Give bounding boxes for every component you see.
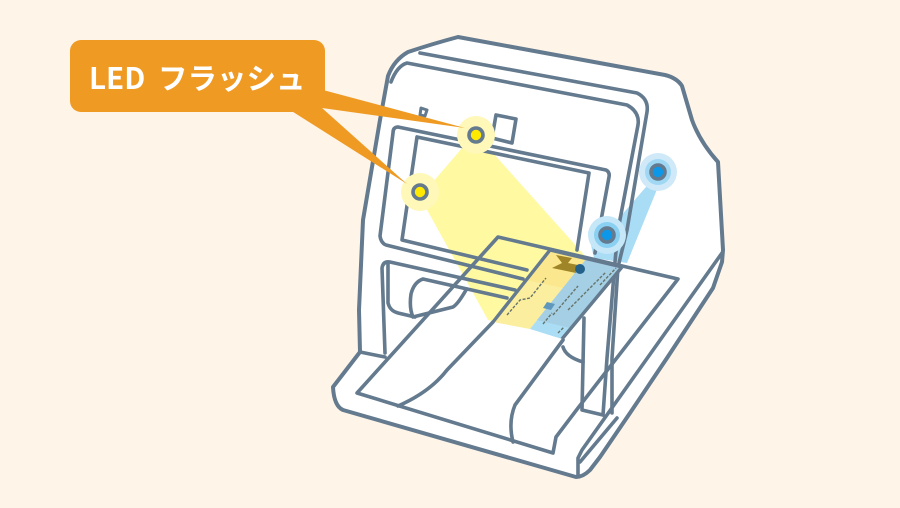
LED dot: left <box>401 173 439 211</box>
front panel bands <box>420 53 647 413</box>
tray ribbons <box>398 322 493 406</box>
device body silhouette <box>333 37 723 477</box>
blue sensor dot: right <box>639 153 677 191</box>
callout label: LED フラッシュ <box>89 56 305 98</box>
card overlap tint <box>537 258 622 328</box>
card print lines <box>507 268 616 333</box>
sensor windows <box>492 115 516 143</box>
yellow flash light <box>420 147 587 329</box>
ID card <box>493 250 622 339</box>
rear support <box>582 318 603 415</box>
base rim <box>578 253 722 476</box>
screen inner frame <box>402 137 589 270</box>
lower slot <box>382 262 515 353</box>
LED dot: top <box>457 116 495 154</box>
device outlines <box>357 53 722 476</box>
paper hump <box>410 279 507 317</box>
callout pointers <box>290 90 465 184</box>
card edges <box>493 250 622 339</box>
callout: LED flash <box>70 40 465 184</box>
card portrait <box>552 255 583 273</box>
blue sensor dot: lower <box>588 216 626 254</box>
card yellow upper tint <box>526 250 587 288</box>
screen outer frame <box>380 127 609 279</box>
blue light beams <box>588 180 660 263</box>
card blue half <box>530 258 622 339</box>
callout box <box>70 40 325 112</box>
card yellow half <box>493 250 587 329</box>
tray <box>357 237 678 453</box>
